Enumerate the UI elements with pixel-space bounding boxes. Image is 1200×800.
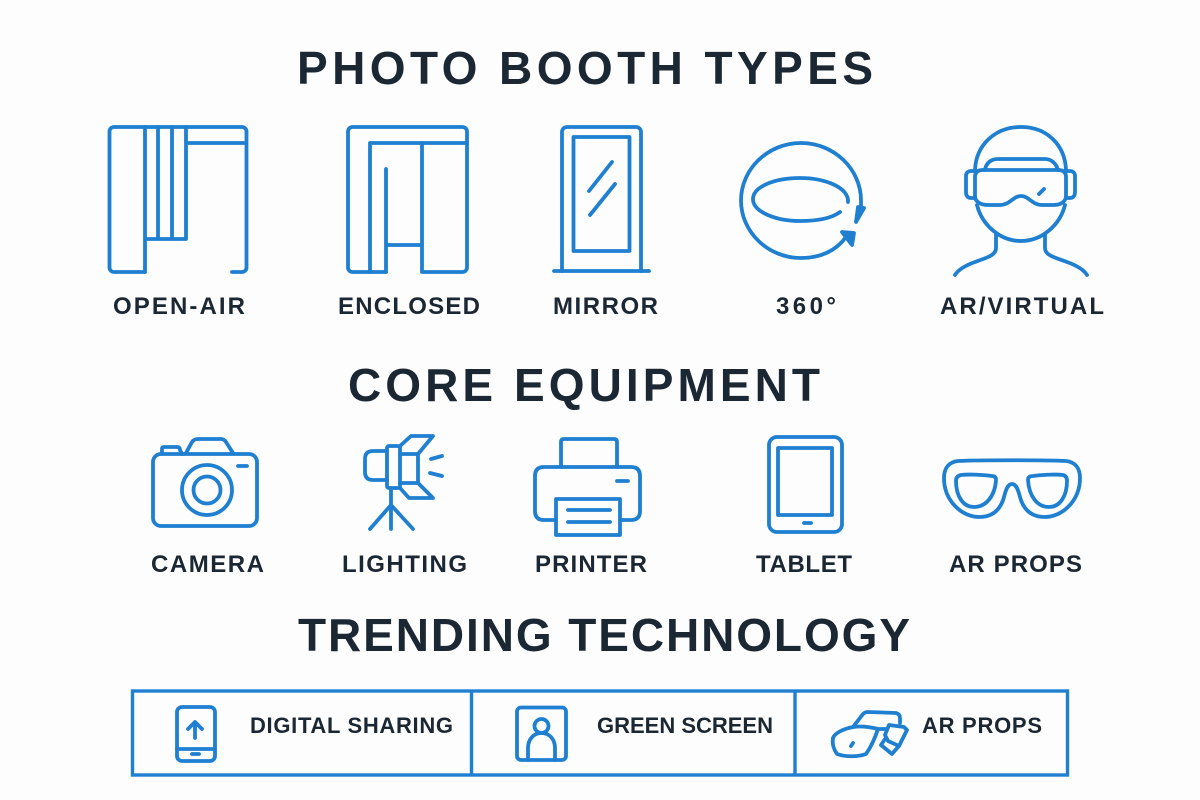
- icon: tablet: [769, 437, 842, 532]
- item: enclosed: [338, 127, 480, 320]
- label: enclosed: ENCLOSED: [338, 293, 480, 320]
- item: lighting: [342, 436, 467, 578]
- item: camera: [151, 439, 264, 578]
- panel: photo booth types: [110, 42, 1104, 320]
- label: open-air: OPEN-AIR: [113, 293, 245, 320]
- icon: printer: [535, 439, 640, 535]
- label: tablet: TABLET: [756, 551, 852, 578]
- icon: camera: [153, 439, 257, 526]
- icon: portrait frame: [517, 708, 566, 760]
- cell: ar props: [833, 712, 1042, 756]
- panel: core equipment: [151, 359, 1082, 578]
- icon: ar props: [833, 712, 907, 756]
- item: tablet: [756, 437, 852, 578]
- label: ar props: AR PROPS: [922, 713, 1042, 738]
- label: mirror: MIRROR: [553, 293, 658, 320]
- heading: trending technology: TRENDING TECHNOLOGY: [298, 609, 910, 661]
- icon: enclosed booth: [348, 127, 467, 272]
- cell: green screen: [517, 708, 773, 760]
- cell: digital sharing: [177, 707, 453, 761]
- label: digital sharing: DIGITAL SHARING: [250, 713, 453, 738]
- item: ar/virtual: [940, 127, 1104, 320]
- label: green screen: GREEN SCREEN: [597, 713, 773, 738]
- heading: photo booth types: PHOTO BOOTH TYPES: [297, 42, 873, 94]
- icon: open-air booth: [110, 127, 246, 272]
- icon: ar glasses: [944, 460, 1080, 517]
- label: ar/virtual: AR/VIRTUAL: [940, 293, 1104, 320]
- icon: person with vr headset: [955, 127, 1087, 275]
- table frame: [132, 691, 1068, 775]
- label: camera: CAMERA: [151, 551, 264, 578]
- heading: core equipment: CORE EQUIPMENT: [348, 359, 820, 411]
- panel: trending technology: [132, 609, 1068, 775]
- label: ar props: AR PROPS: [949, 551, 1082, 578]
- icon: studio light: [365, 436, 442, 529]
- item: ar props glasses: [944, 460, 1082, 578]
- icon: phone with upload arrow: [177, 707, 215, 761]
- label: 360: 360°: [776, 293, 836, 320]
- item: mirror: [553, 127, 658, 320]
- label: lighting: LIGHTING: [342, 551, 467, 578]
- item: open-air: [110, 127, 246, 320]
- item: printer: [535, 439, 647, 578]
- icon: 360 rotation: [741, 143, 864, 258]
- icon: mirror booth: [554, 127, 649, 271]
- label: printer: PRINTER: [535, 551, 647, 578]
- item: 360: [741, 143, 864, 320]
